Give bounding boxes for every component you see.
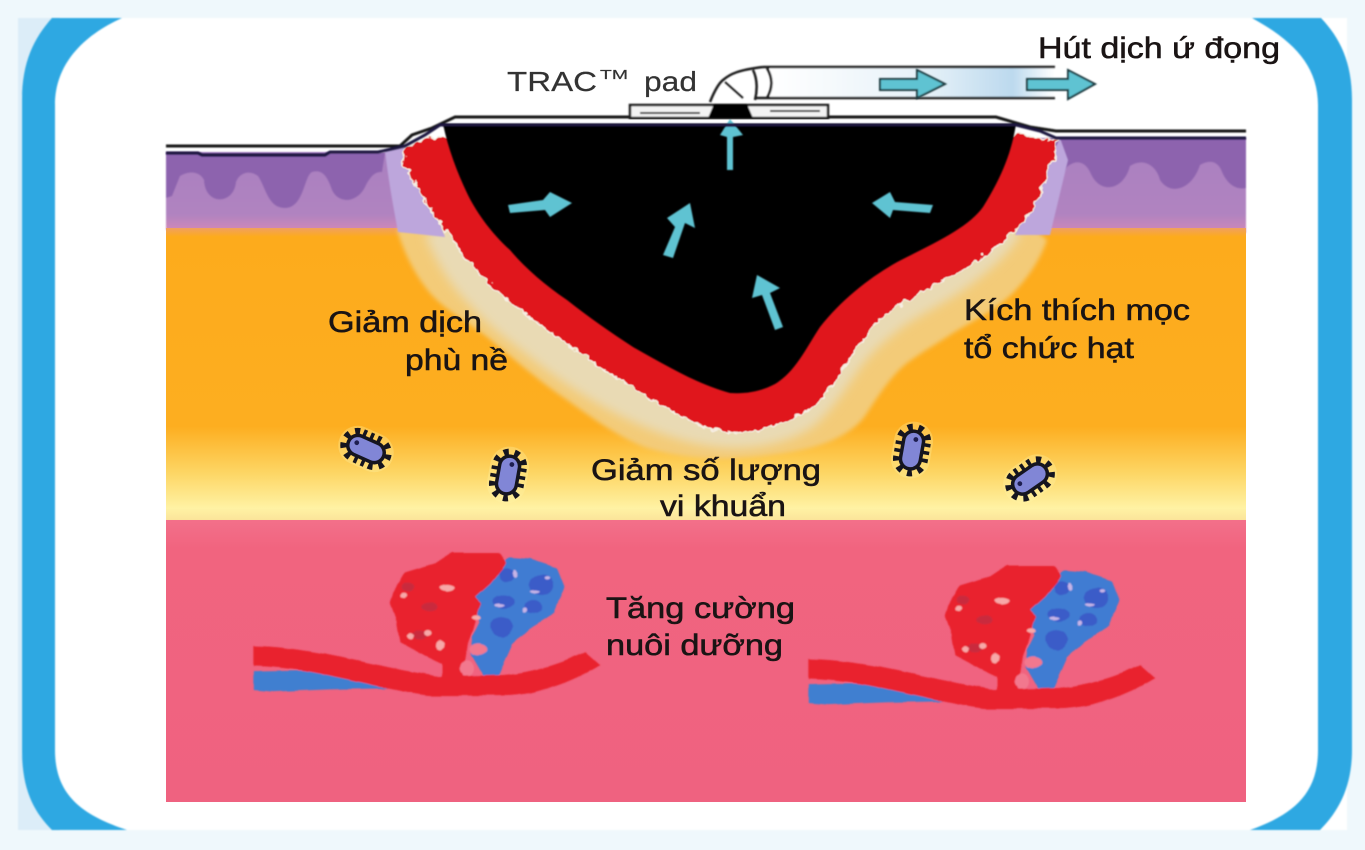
arrow: up to pad — [720, 119, 743, 170]
label: increase nutrition: nuôi dưỡng — [606, 629, 783, 662]
layer: fat — [166, 228, 1246, 520]
wound halo inner — [425, 200, 1020, 448]
drape film over skin and wound — [166, 117, 1246, 155]
label: reduce edema — [328, 306, 508, 377]
bacterium 4 — [1009, 460, 1051, 498]
wound halo, skin part right — [1015, 138, 1068, 235]
wound cavity black — [443, 124, 1016, 393]
layer: skin, left — [166, 152, 406, 230]
arrow: tube right — [1027, 70, 1095, 99]
bacterium 2 — [495, 455, 521, 495]
granulation tissue red — [403, 135, 1058, 433]
arrow: tube left — [880, 70, 945, 98]
wound halo outer — [397, 200, 1047, 459]
label: TRAC pad: TM — [600, 67, 628, 82]
label: increase nutrition: Tăng cường — [606, 592, 795, 625]
blood vessels right — [808, 569, 1155, 709]
label: TRAC pad: TRAC — [507, 66, 597, 97]
arrow: up left — [752, 275, 783, 330]
blood vessels left — [253, 556, 600, 696]
label: reduce bacteria: vi khuẩn — [660, 490, 786, 523]
label: TRAC pad — [507, 66, 697, 97]
label: reduce edema: Giảm dịch — [328, 306, 482, 339]
arrows in wound — [508, 119, 933, 330]
label: TRAC pad: pad — [644, 66, 697, 97]
bacterium 3 — [899, 430, 925, 470]
thin line under bacteria — [600, 512, 866, 516]
label: stimulate granulation — [964, 294, 1190, 365]
tube — [710, 67, 1055, 102]
bacterium 1 — [345, 432, 387, 466]
label: increase nutrition — [606, 592, 795, 662]
layer: skin, right — [1040, 138, 1246, 233]
wound halo, skin part left — [385, 146, 445, 237]
label: suction: Hút dịch ứ đọng — [1038, 32, 1280, 65]
frame: left blue band — [22, 18, 127, 830]
label: stimulate granulation: Kích thích mọc — [964, 294, 1190, 327]
label: reduce bacteria — [591, 454, 821, 523]
arrow: left — [872, 192, 933, 218]
arrow: right — [508, 192, 572, 217]
frame: right blue band — [1250, 18, 1352, 830]
label: stimulate granulation: tổ chức hạt — [964, 332, 1135, 365]
arrow: up right — [663, 203, 695, 258]
label: reduce edema: phù nề — [405, 344, 508, 377]
layer: dermis pink — [166, 520, 1246, 802]
label: reduce bacteria: Giảm số lượng — [591, 454, 821, 487]
TRAC pad — [630, 104, 828, 118]
